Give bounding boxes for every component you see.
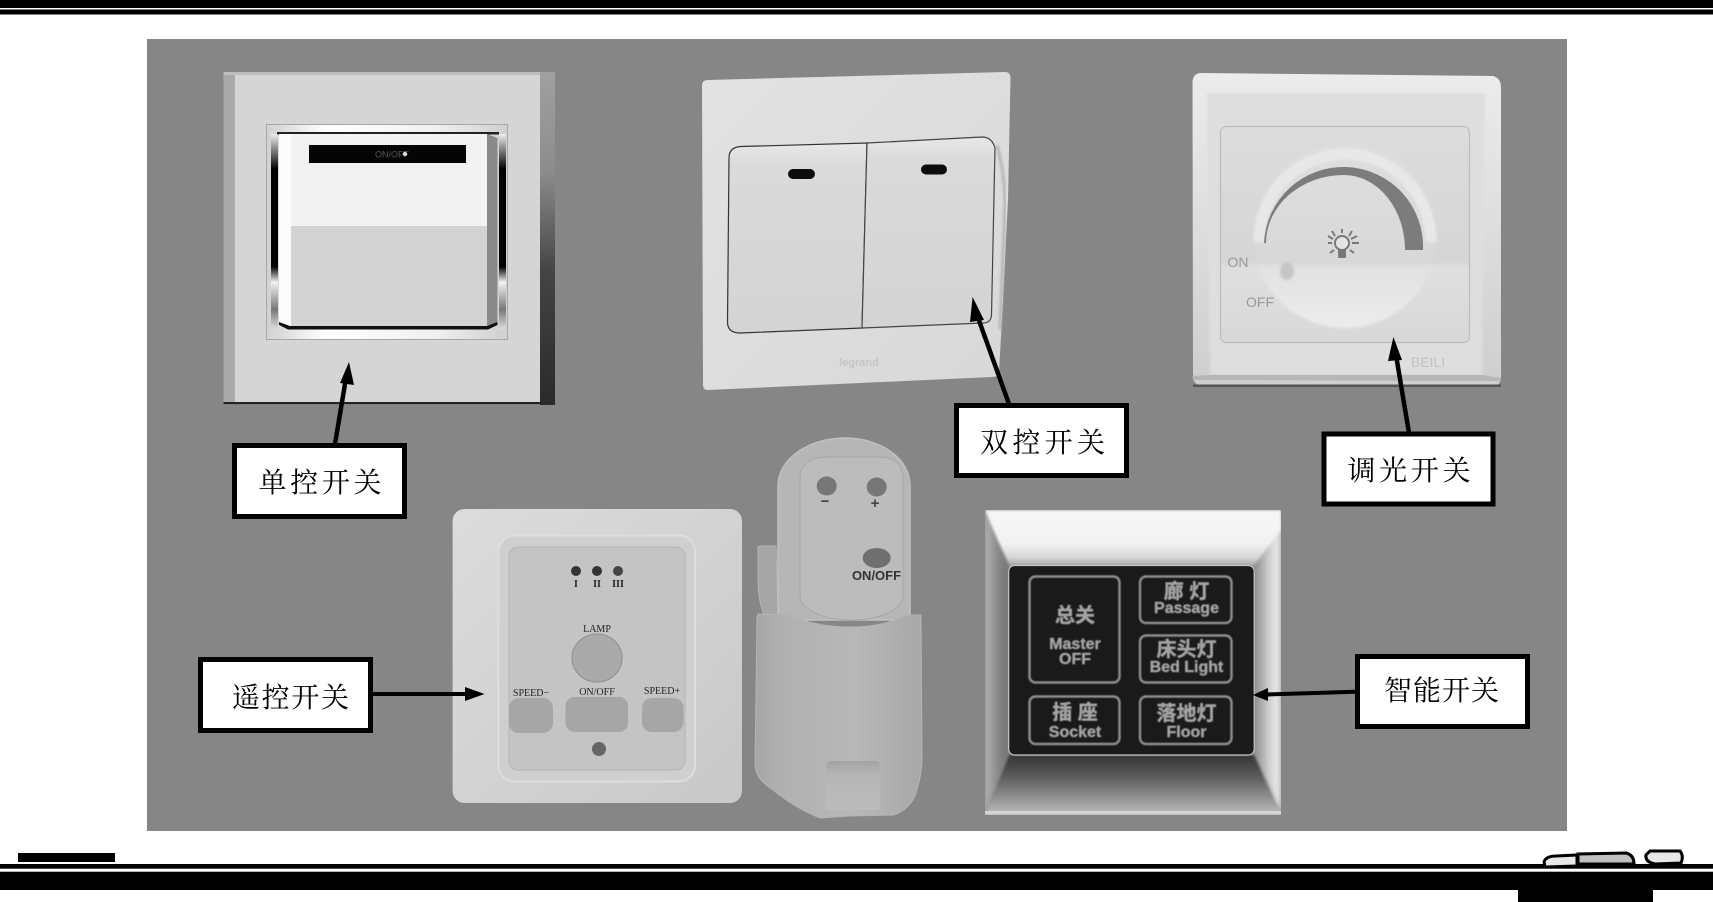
rocker left [728,143,867,333]
header rule [0,0,1713,14]
touch panel: OFF [1059,651,1091,668]
arrow: double-control [970,297,1009,404]
label: remote switch: 遥控开关 [232,682,349,714]
touch panel: Bed Light [1150,659,1224,676]
indicator window: ON/OFF [375,150,409,160]
remote wall panel photo: SPEED− [513,688,549,699]
handheld remote in holder photo: − [821,493,830,510]
single-control switch photo [224,72,555,405]
touch panel: 床头灯 [1156,637,1216,661]
label: dimmer switch: 调光开关 [1348,455,1470,487]
label: remote switch [200,660,370,730]
double-control switch photo: legrand [839,357,879,369]
remote wall panel photo: SPEED+ [644,686,680,697]
dimmer switch photo [1192,73,1501,387]
label: double-control switch: 双控开关 [980,427,1105,459]
arrow: remote [373,687,484,701]
footer section tab [18,853,115,862]
remote wall panel photo: ON/OFF [579,687,615,698]
label: smart switch: 智能开关 [1384,675,1499,707]
dimmer arc scale [1264,167,1423,250]
touch panel: Socket [1049,724,1102,741]
smart touch switch photo [985,510,1281,816]
touch panel: 总关 [1055,604,1095,627]
handheld remote in holder photo: + [871,495,880,512]
touch panel: Master [1049,636,1101,653]
touch panel: Passage [1154,600,1219,617]
label: double-control switch [956,406,1126,476]
grey photo panel [147,39,1567,831]
touch panel [1009,566,1254,755]
status LEDs [571,566,624,590]
status LEDs: III [612,579,624,590]
ON / OFF marks: ON [1228,254,1248,270]
arrow: smart [1253,688,1355,701]
indicator window [309,145,466,163]
touch panel: 落地灯 [1156,702,1216,725]
handheld remote in holder photo [755,438,922,818]
dimmer switch photo: BEILI [1411,354,1445,370]
handheld remote in holder photo: ON/OFF [852,568,901,583]
label: dimmer switch [1324,434,1493,504]
holder cutout [826,761,880,810]
remote wall panel photo: LAMP [583,624,611,635]
footer rule [0,864,1713,902]
double-control switch photo [702,72,1010,390]
touch panel: 廊 灯 [1164,579,1209,603]
dimmer switch photo: OFF [1246,294,1274,310]
status LEDs: II [593,579,601,590]
touch panel: Floor [1166,724,1206,741]
arrow: single-control [335,362,354,444]
label: smart switch [1358,656,1528,726]
label: single-control switch [234,446,404,516]
status LEDs: I [574,579,578,590]
footer pen ornament [1544,851,1682,867]
bulb icon [1328,229,1359,257]
rocker right [862,137,995,328]
label: single-control switch: 单控开关 [258,467,382,499]
remote wall panel photo [453,509,742,803]
touch panel: 插 座 [1052,700,1098,724]
arrow: dimmer [1388,337,1409,433]
